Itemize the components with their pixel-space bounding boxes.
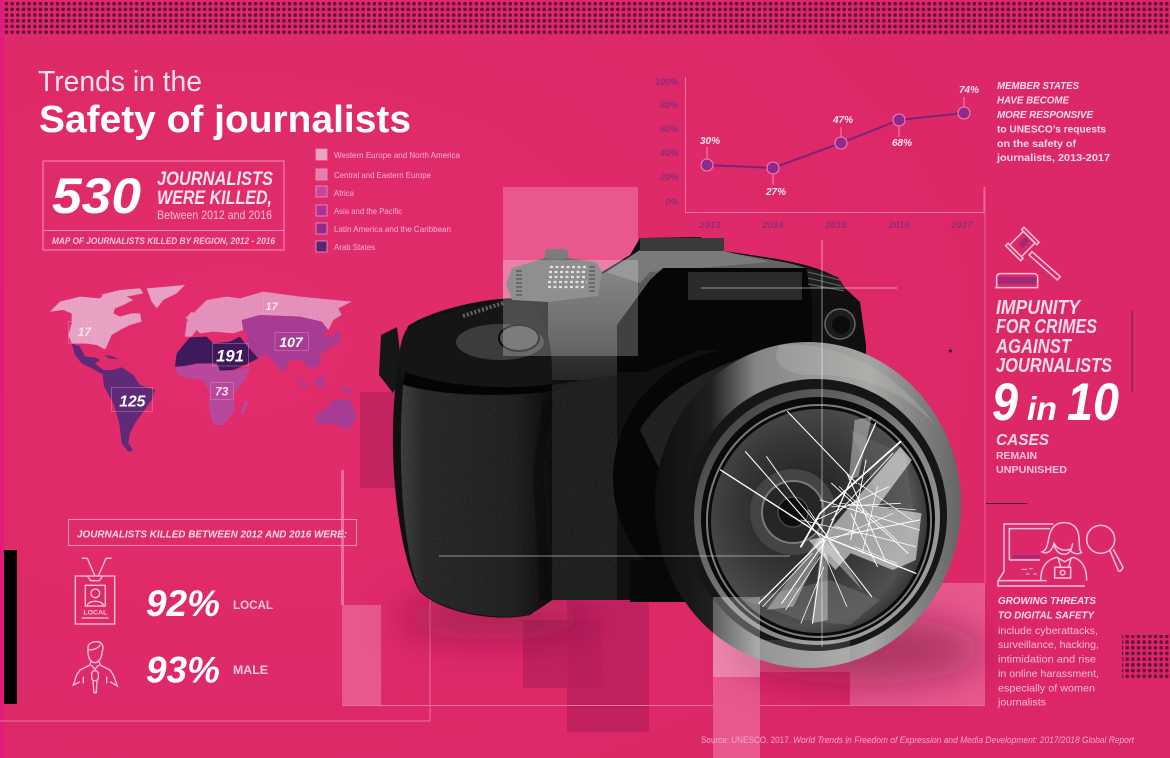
panel: killed journalists profile: JOURNALISTS KILLED BETWEEN 2012 AND 2016 WERE:: [77, 530, 347, 540]
text: digital safety: GROWING THREATS: [998, 595, 1096, 607]
camera with broken lens: [379, 237, 961, 677]
world map: [50, 285, 357, 452]
text: impunity: UNPUNISHED: [996, 464, 1067, 476]
world map: 125: [119, 394, 146, 411]
map value labels: [68, 298, 308, 412]
data values: 47%: [832, 115, 853, 126]
data values: 30%: [700, 136, 720, 147]
world map: 17: [78, 325, 92, 339]
x axis labels: 2016: [887, 220, 910, 231]
x axis labels: 2013: [698, 220, 721, 231]
text: digital safety: intimidation and rise: [998, 654, 1096, 666]
panel: 530 journalists killed: Between 2012 and 2016: [157, 208, 272, 222]
text: impunity: FOR CRIMES: [996, 316, 1098, 338]
source line: World Trends in Freedom of Expression and Media Development: 2017/2018 Global Report: [793, 735, 1134, 745]
y axis labels: 40%: [659, 148, 680, 159]
panel: killed journalists profile: 92%: [146, 583, 220, 624]
panel: killed journalists profile: 93%: [146, 650, 220, 690]
leather grip: [401, 375, 617, 617]
text: impunity: [992, 297, 1119, 476]
icon: gavel: [996, 227, 1060, 288]
region: Latin America: [72, 343, 155, 452]
panel: 530 journalists killed: JOURNALISTS: [157, 169, 273, 190]
world map: 17: [266, 301, 279, 313]
handgrip top: [399, 302, 552, 395]
text: member states: on the safety of: [997, 138, 1077, 150]
background geometric blocks: [0, 187, 985, 758]
camera shadow: [395, 596, 985, 684]
text: member states: to UNESCO’s requests: [997, 124, 1106, 136]
data points: [701, 107, 970, 174]
panel: killed journalists profile: [68, 520, 356, 693]
lens glass: [711, 409, 927, 633]
region: North America: [50, 293, 142, 349]
data values: 27%: [765, 187, 786, 198]
translucent overlays on camera: [503, 260, 850, 677]
map legend: Western Europe and North America: [334, 150, 460, 160]
lens barrel: [613, 348, 877, 608]
map legend: Asia and the Pacific: [334, 206, 403, 216]
x axis labels: [698, 220, 973, 231]
map legend: Latin America and the Caribbean: [334, 224, 451, 234]
title: [38, 66, 411, 141]
data values: 68%: [892, 138, 912, 149]
region: Greenland and Arctic: [100, 285, 185, 308]
panel: 530 journalists killed: MAP OF JOURNALISTS KILLED BY REGION, 2012 - 2016: [52, 236, 276, 246]
title: Safety of journalists: [39, 99, 411, 141]
data values: [700, 85, 979, 198]
region: Europe and Russia: [185, 292, 352, 337]
text: impunity: 10: [1067, 373, 1119, 432]
world map: 191: [216, 346, 244, 365]
x axis labels: 2017: [950, 220, 973, 231]
camera strap lug: [379, 327, 403, 393]
text: member states: HAVE BECOME: [997, 94, 1070, 106]
text: digital safety: surveillance, hacking,: [998, 639, 1099, 651]
panel: killed journalists profile: MALE: [233, 665, 268, 677]
text: impunity: REMAIN: [996, 450, 1037, 462]
text: member states: journalists, 2013-2017: [996, 152, 1110, 164]
y axis labels: [655, 77, 680, 208]
top plate: [548, 251, 806, 380]
icon: press badge: [75, 558, 115, 624]
text: impunity: IMPUNITY: [996, 297, 1081, 319]
lens cracks: [721, 412, 922, 623]
bottom-right halftone dots: [1122, 635, 1170, 680]
panel: killed journalists profile: LOCAL: [233, 600, 273, 612]
mode dial: [506, 249, 602, 302]
region: Arab States: [175, 337, 258, 371]
icon: press badge: LOCAL: [83, 609, 107, 616]
text: member states: MORE RESPONSIVE: [997, 109, 1094, 121]
thin crossing lines: [439, 240, 897, 647]
text: digital safety: include cyberattacks,: [998, 625, 1098, 637]
text: impunity: AGAINST: [995, 336, 1072, 358]
black side bar: [4, 550, 17, 704]
text: digital safety: [997, 595, 1099, 708]
source line: Source: UNESCO. 2017.: [701, 735, 791, 745]
region: Asia and the Pacific: [242, 315, 357, 430]
viewfinder block: [617, 268, 846, 372]
panel: 530 journalists killed: WERE KILLED,: [157, 188, 272, 209]
panel: 530 journalists killed: [43, 161, 284, 250]
y axis labels: 0%: [665, 197, 680, 208]
panel: 530 journalists killed: 530: [52, 168, 141, 224]
world map: 107: [279, 334, 304, 350]
region: Africa: [175, 364, 250, 425]
lens hood: [655, 342, 961, 668]
line chart: response rate: [655, 77, 984, 231]
text: digital safety: in online harassment,: [998, 668, 1099, 680]
map legend: Central and Eastern Europe: [334, 170, 431, 180]
data values: 74%: [959, 85, 979, 96]
dark accent lines: [986, 311, 1133, 504]
y axis labels: 60%: [660, 124, 680, 135]
text: digital safety: journalists: [997, 696, 1046, 708]
small black dot: [949, 350, 952, 352]
icon: male reporter: [73, 642, 117, 693]
camera body: [393, 237, 866, 618]
text: impunity: CASES: [996, 432, 1049, 449]
text: digital safety: especially of women: [998, 682, 1095, 694]
text: member states: MEMBER STATES: [997, 80, 1079, 92]
icon: laptop and woman with magnifier: [998, 523, 1123, 586]
eyepiece dial: [825, 309, 855, 339]
world map: 73: [215, 384, 229, 398]
map legend: Arab States: [334, 242, 375, 252]
text: impunity: JOURNALISTS: [996, 355, 1113, 377]
y axis labels: 100%: [655, 77, 680, 88]
y axis labels: 80%: [660, 100, 680, 111]
x axis labels: 2015: [824, 220, 847, 231]
text: digital safety: TO DIGITAL SAFETY: [998, 610, 1095, 622]
map legend: Africa: [334, 188, 354, 198]
title: Trends in the: [38, 66, 202, 98]
text: impunity: in: [1027, 390, 1057, 427]
map legend: [316, 149, 460, 252]
x axis labels: 2014: [761, 220, 784, 231]
y axis labels: 20%: [659, 172, 680, 183]
top halftone dot band: [4, 1, 1170, 35]
text: impunity: 9: [992, 373, 1018, 432]
text: member states: [996, 80, 1110, 164]
